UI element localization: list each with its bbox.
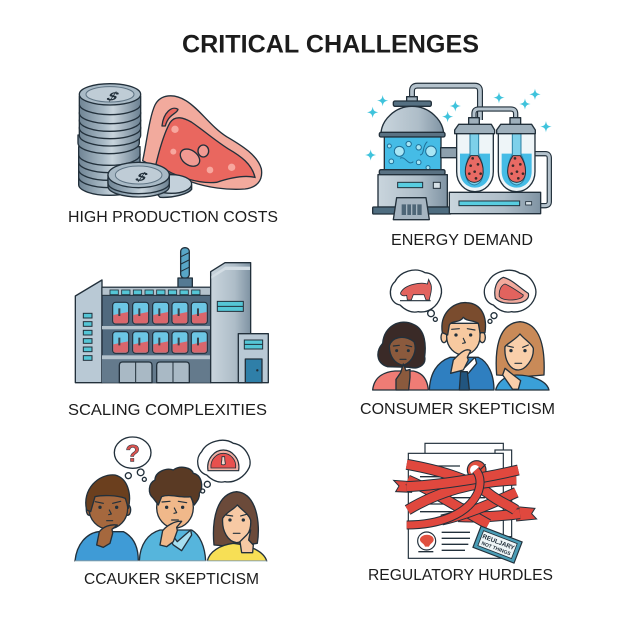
- label: REGULATORY HURDLES: [368, 567, 553, 584]
- panel: regulatory hurdles: [368, 443, 553, 584]
- tall coin stack: $: [103, 90, 122, 103]
- label: CCAUKER SKEPTICISM: [84, 571, 259, 588]
- icon: coins and meat: [78, 84, 262, 197]
- icon: three consumers with thought bubbles: [373, 270, 549, 390]
- person: woman left: [373, 322, 428, 390]
- pipes: [412, 86, 549, 206]
- icon: three people with thought bubbles: [75, 437, 267, 562]
- thought bubble: question: ?: [125, 441, 140, 468]
- icon: bioreactor: [365, 86, 552, 220]
- panel: energy demand: [365, 86, 552, 249]
- reactor windows: [113, 302, 207, 353]
- annex: [238, 334, 268, 383]
- panel: scaling complexities: [68, 248, 268, 419]
- label: CONSUMER SKEPTICISM: [360, 401, 555, 418]
- chimney: [178, 248, 192, 287]
- person: woman right: [207, 492, 267, 561]
- stamp: [473, 526, 522, 563]
- small coin stack: $: [132, 170, 151, 184]
- left vessel: [455, 118, 495, 192]
- left wing: [75, 280, 102, 383]
- thought bubble: animal: [390, 270, 441, 321]
- connector: [441, 148, 457, 158]
- back documents: [425, 443, 512, 537]
- person: man centre: [429, 303, 494, 390]
- label: ENERGY DEMAND: [391, 232, 533, 249]
- tower: [211, 263, 251, 383]
- thought bubble: steak: [484, 270, 536, 323]
- panel: consumer skepticism: [360, 270, 555, 418]
- front document: [408, 453, 503, 558]
- sparkles: [365, 89, 552, 161]
- icon: factory: [75, 248, 268, 383]
- meat: [143, 96, 262, 189]
- person: woman right: [496, 322, 549, 390]
- panel: high production costs: [68, 84, 278, 226]
- main tank: [373, 97, 451, 220]
- label: HIGH PRODUCTION COSTS: [68, 209, 278, 226]
- person: man left: [75, 475, 138, 561]
- stamp: REULJARY: [481, 533, 516, 552]
- platform: [449, 192, 541, 214]
- right vessel: [497, 118, 535, 192]
- title: CRITICAL CHALLENGES: [182, 30, 479, 58]
- base line: [75, 560, 267, 563]
- thought bubble: question: [114, 437, 151, 481]
- main hall: [102, 287, 211, 383]
- thought bubble: meat: [198, 440, 250, 493]
- person: man centre: [139, 467, 206, 561]
- small coin stack: [108, 162, 192, 197]
- panel: ccauker skepticism: [75, 437, 267, 588]
- tall coin stack: [78, 84, 141, 195]
- stamp: NOT THINGS: [480, 541, 512, 558]
- label: SCALING COMPLEXITIES: [68, 402, 267, 419]
- icon: documents tied in red tape: [394, 443, 537, 563]
- red tape: [394, 464, 537, 525]
